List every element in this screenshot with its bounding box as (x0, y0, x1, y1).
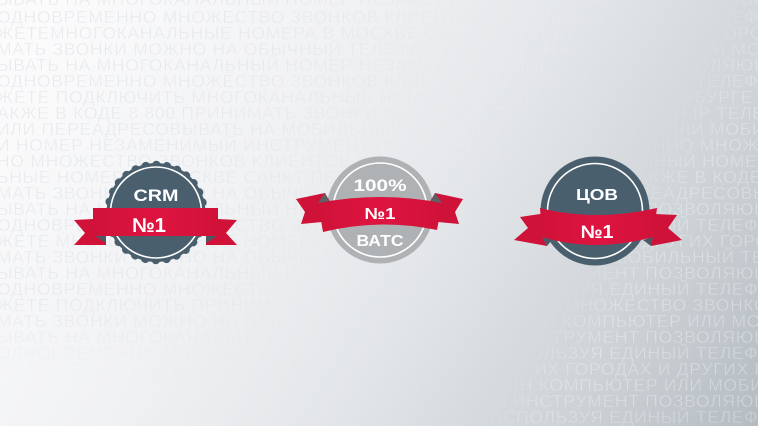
grey disc (326, 156, 434, 264)
ribbon (514, 208, 682, 246)
label: №1: №1 (364, 206, 396, 223)
dark disc (540, 156, 650, 266)
badge: CRM №1 (74, 163, 237, 262)
ribbon (74, 208, 237, 245)
badge: ЦОВ №1 (514, 156, 682, 266)
label: ВАТС: ВАТС (356, 233, 404, 250)
label: №1: №1 (132, 215, 166, 237)
label: №1: №1 (580, 222, 614, 242)
badge: 100% №1 ВАТС (296, 156, 463, 264)
label: ЦОВ: ЦОВ (576, 187, 618, 204)
ribbon (296, 193, 463, 232)
label: 100%: 100% (354, 176, 406, 195)
scalloped seal (106, 163, 206, 262)
label: CRM: CRM (134, 187, 178, 205)
